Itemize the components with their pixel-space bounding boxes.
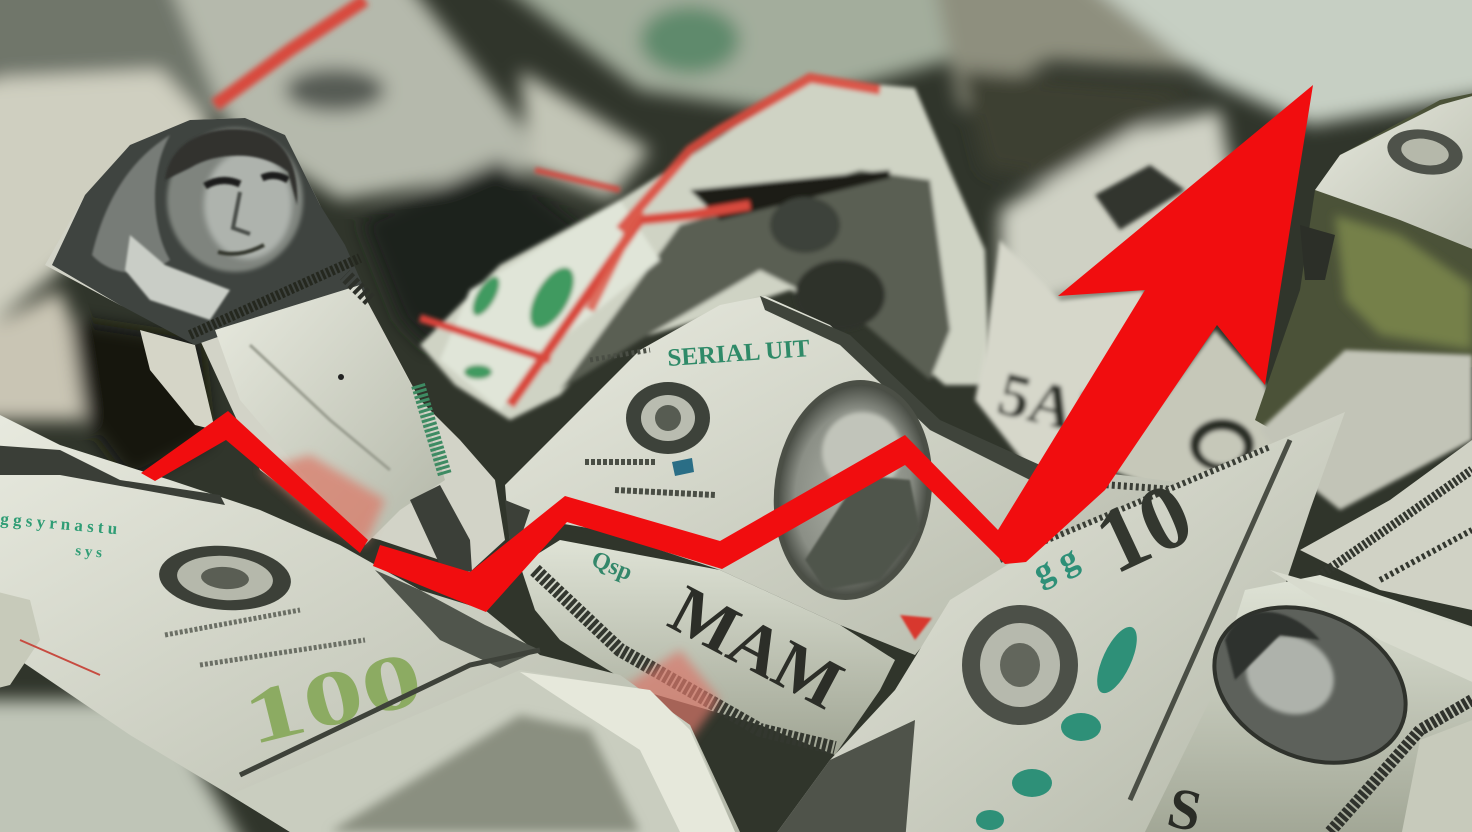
right bill with seal and green interior xyxy=(1255,85,1472,610)
lower right bill with seal and 10: g g xyxy=(1026,537,1084,592)
arrow main line and head xyxy=(373,85,1313,612)
right middle background bill with numerals xyxy=(975,165,1285,500)
red rising arrow xyxy=(141,85,1313,612)
crumpled bill with Franklin portrait xyxy=(45,118,505,572)
lower left hundred dollar bill: g g s y r n a s t u xyxy=(0,509,118,538)
central hundred dollar bill with portrait xyxy=(505,296,1185,655)
bill lettering: SERIAL UIT xyxy=(667,335,811,372)
lower right bill with seal and 10: 10 xyxy=(1080,462,1207,593)
arrow left segment xyxy=(141,411,368,553)
lower centre bill strip: MAM xyxy=(657,571,855,725)
lower centre bill strip: Qsp xyxy=(588,546,636,586)
lower right bill with portrait xyxy=(1140,570,1472,832)
lower centre bill strip xyxy=(520,540,895,755)
lower left hundred dollar bill: s y s xyxy=(75,543,103,561)
right middle background bill with numerals: 5A5 xyxy=(992,360,1112,451)
lower left hundred dollar bill xyxy=(0,410,740,832)
green and red strapped bill, top centre xyxy=(420,78,990,420)
blurred red strap, top left xyxy=(215,0,365,105)
100 denomination: 100 xyxy=(235,634,431,761)
lower right bill with seal and 10 xyxy=(770,412,1345,832)
